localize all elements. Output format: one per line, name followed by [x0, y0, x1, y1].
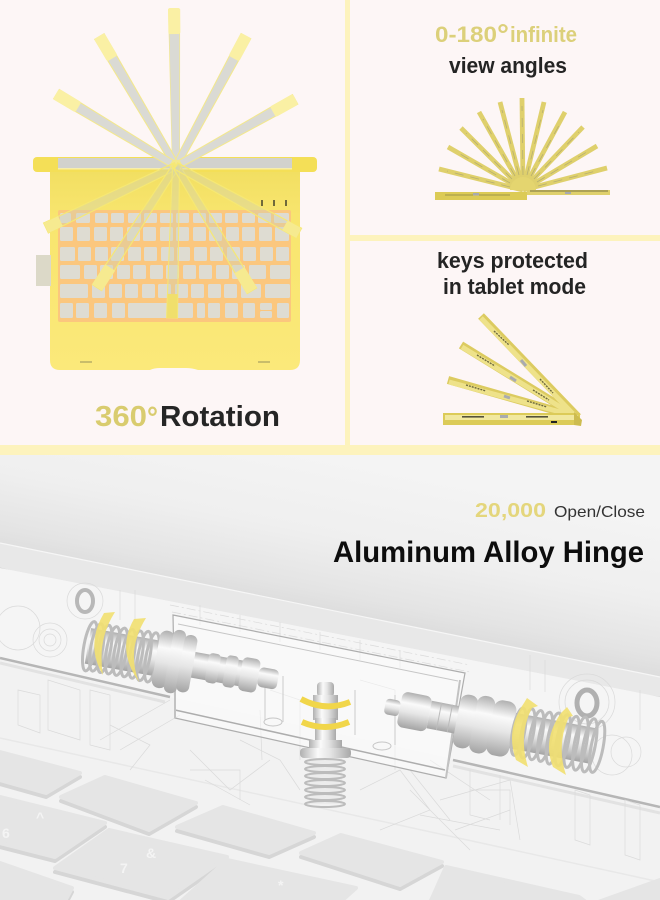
keyboard key sides [0, 756, 590, 900]
left spring and shaft [78, 614, 284, 712]
panel: aluminum alloy hinge [0, 455, 660, 900]
hinge bar with tablet edge [33, 157, 317, 172]
fan of tablet positions [435, 98, 610, 200]
hinge housing [173, 615, 465, 778]
central bolt [300, 682, 351, 807]
heading: aluminum alloy hinge: Aluminum Alloy Hinge [333, 536, 644, 569]
panel dividers [0, 0, 660, 455]
key legends [2, 809, 284, 893]
right rotation arrows [512, 698, 573, 775]
left rotation arrows [94, 612, 146, 682]
key legends: * [278, 877, 284, 893]
key legends: & [146, 845, 156, 861]
panel: keys protected [437, 248, 588, 426]
central rotation arrows [301, 699, 350, 727]
tablet stack folded in stages [443, 316, 582, 426]
mounting ring right [577, 690, 597, 716]
keyboard keys [0, 752, 660, 900]
heading: 0-180 infinite view angles: 0-180 [435, 22, 497, 47]
heading: 360 rotation: 360 [95, 401, 147, 433]
heading: 20,000 open/close [475, 500, 645, 522]
panel: 360 rotation [0, 0, 345, 445]
key legends: 7 [120, 860, 128, 876]
heading: 20,000 open/close: 20,000 [475, 500, 546, 522]
keyboard base [36, 172, 300, 370]
right spring and shaft [380, 678, 608, 776]
heading: 0-180 infinite view angles: infinite [510, 22, 577, 47]
heading: 360 rotation: Rotation [160, 401, 280, 433]
heading: keys protected in tablet mode: keys protected [437, 248, 588, 273]
heading: 0-180 infinite view angles [435, 19, 577, 78]
heading: 20,000 open/close: Open/Close [554, 504, 645, 521]
mounting ring left [77, 590, 93, 612]
heading: 360 rotation [95, 400, 280, 435]
heading: keys protected in tablet mode [437, 248, 588, 299]
hinge channel [0, 568, 660, 882]
rotating tablet edges, lower [44, 161, 302, 318]
panel: view angles [435, 19, 610, 200]
heading: keys protected in tablet mode: in tablet mode [443, 274, 586, 299]
key legends: 6 [2, 825, 10, 841]
wireframe overlay [0, 583, 641, 860]
tablet lid [0, 455, 660, 697]
heading: 0-180 infinite view angles: ° [497, 19, 509, 51]
heading: 360 rotation: ° [147, 400, 158, 435]
key legends: ^ [36, 809, 44, 825]
rotating tablet edges, upper [53, 8, 299, 171]
heading: 0-180 infinite view angles: view angles [449, 53, 567, 78]
